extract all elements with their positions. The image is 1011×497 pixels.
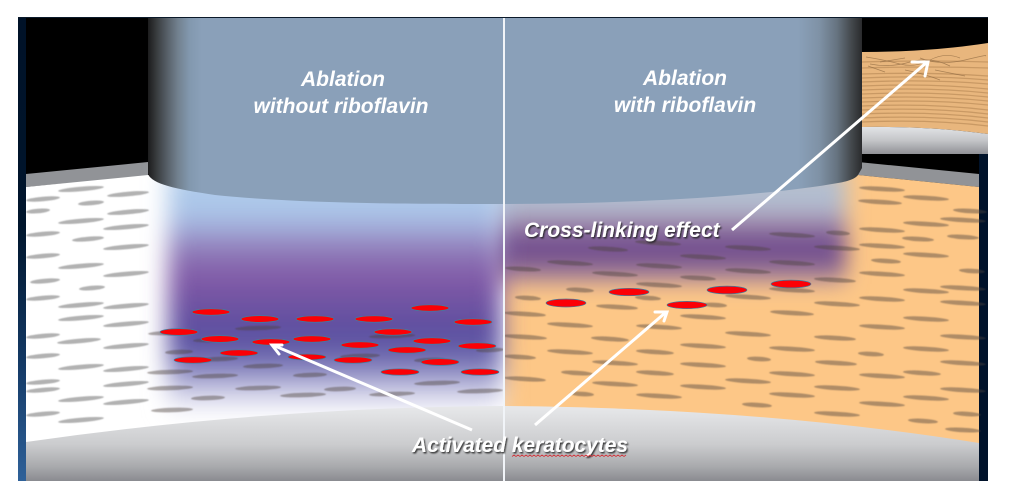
inset grey layer [862, 127, 988, 154]
left stroma fill [26, 175, 510, 445]
right navy edge strip [979, 154, 988, 481]
keratocytes: left white stroma [26, 185, 149, 424]
label: activated keratocytes: Activated keratocytes [411, 434, 628, 457]
inset cross-link fibres [866, 55, 986, 80]
inset collagen stripes [862, 61, 988, 126]
keratocytes: right peach stroma [503, 185, 987, 433]
arrow: activated keratocytes, right [535, 312, 667, 425]
top border line [18, 17, 988, 18]
ablation beam cylinder [148, 17, 862, 204]
heading: ablation with riboflavin [614, 67, 756, 117]
right epithelium band [858, 162, 979, 187]
left navy edge strip [18, 17, 26, 481]
arrow: activated keratocytes, left [272, 345, 472, 430]
activated keratocytes: without riboflavin [160, 305, 499, 375]
inset peach tissue [862, 43, 988, 134]
keratocytes: under purple zone [147, 325, 504, 413]
spell-check squiggle [512, 455, 626, 456]
purple zone: without riboflavin [168, 170, 502, 410]
heading: ablation without riboflavin: Ablation [300, 68, 385, 91]
heading: ablation without riboflavin [254, 68, 428, 118]
heading: ablation with riboflavin: Ablation [642, 67, 727, 90]
inset: cross-linked tissue [862, 43, 988, 154]
centre divider line [503, 17, 505, 481]
activated keratocytes: with riboflavin [546, 280, 811, 309]
heading: ablation with riboflavin: with riboflavin [614, 94, 756, 117]
grey lower cornea layer [26, 406, 979, 481]
heading: ablation without riboflavin: without riboflavin [254, 95, 428, 118]
purple zone: cross-linking effect [490, 170, 846, 284]
left epithelium band [26, 162, 148, 187]
panel: right peach cornea stroma [504, 162, 979, 445]
arrow: cross-linking effect to inset [732, 62, 928, 230]
panel: left white cornea stroma [26, 162, 510, 445]
label: cross-linking effect: Cross-linking effect [524, 219, 721, 242]
right stroma fill [504, 175, 979, 445]
